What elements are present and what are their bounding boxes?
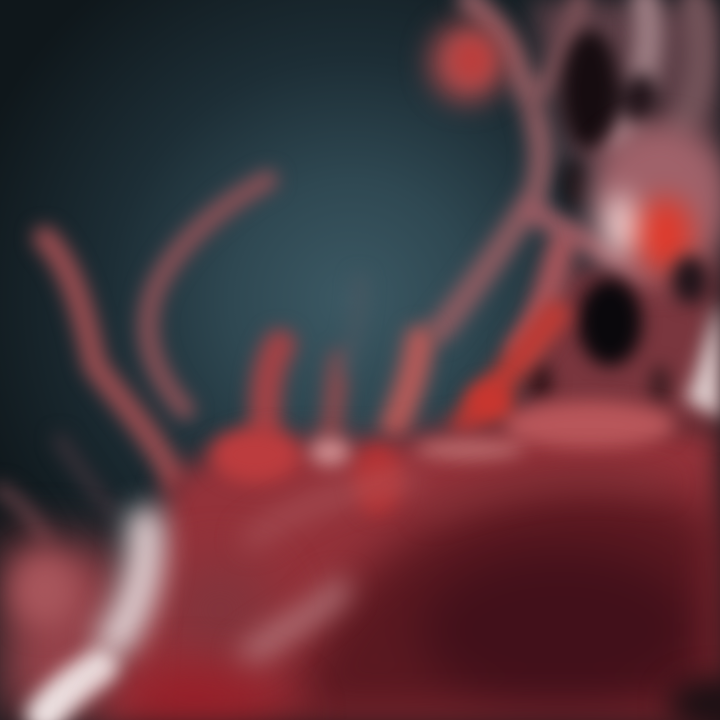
central mass [100,417,720,720]
top right red bulb [430,22,506,102]
rim highlights [210,382,675,516]
dark cell and right pale streak [528,256,720,420]
dark voids between branches [561,30,660,211]
lower dark red dome [290,484,720,720]
top right muted tissue [530,0,720,190]
left tendrils [0,180,555,540]
lower left pink tissue [0,538,130,720]
lower left white highlights [115,525,146,640]
right side bright cell [588,125,720,285]
dome streak highlights [250,480,660,655]
mid-left muted pink [165,560,275,660]
bottom right dark corner [668,678,720,720]
top right tree branches [440,0,701,350]
bottom dark red base [100,672,300,720]
right side dim tissue behind dark cell [510,250,720,430]
